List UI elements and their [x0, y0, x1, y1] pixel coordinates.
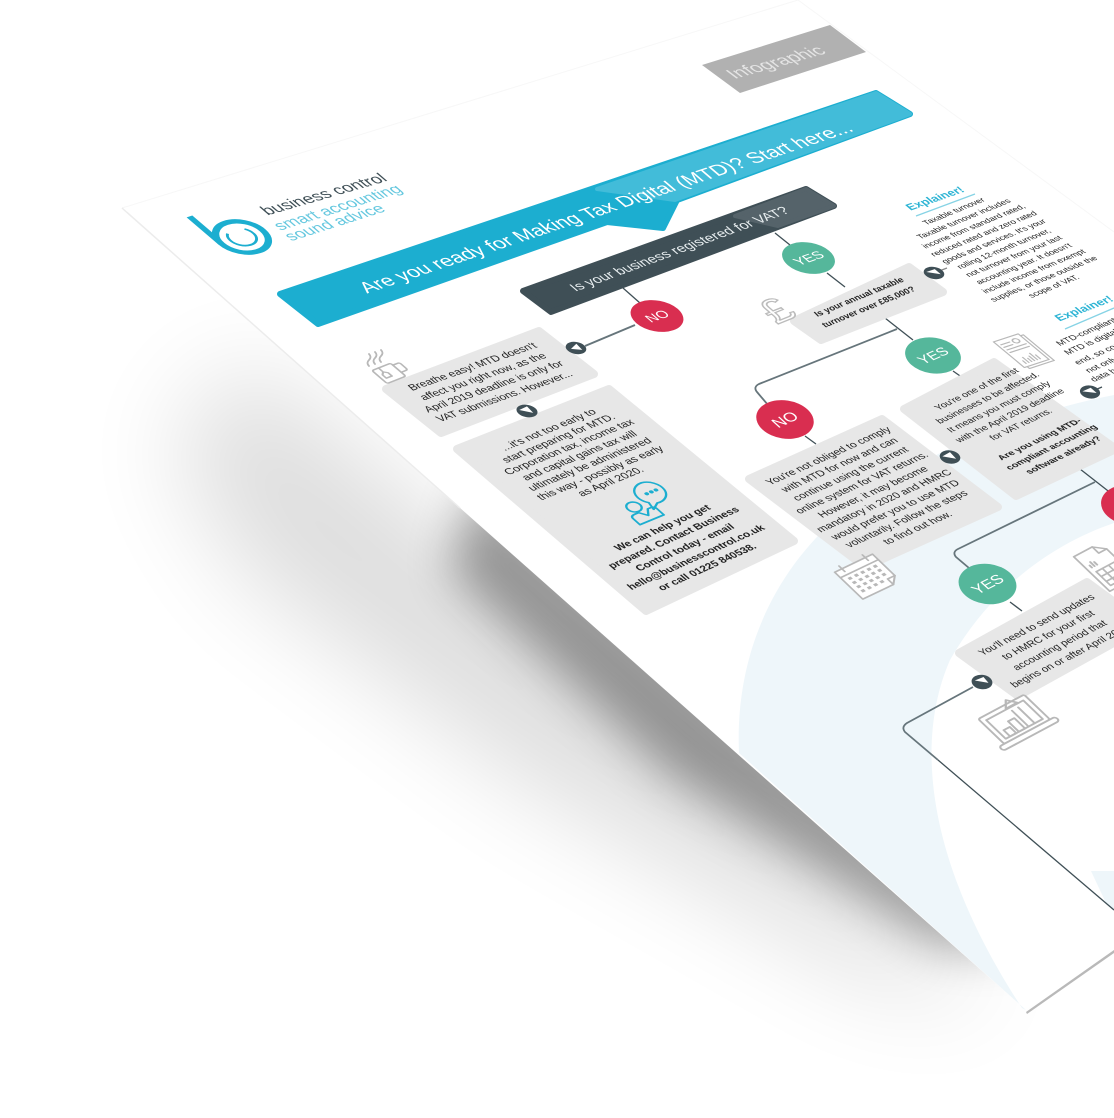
title banner	[280, 93, 910, 324]
panel: not obliged: continue using the current	[790, 445, 912, 503]
text: call to action: We can help you get	[612, 503, 714, 553]
explainer: taxable turnover: accounting year. It doesn't	[973, 241, 1075, 286]
text: MTD software question: Are you using MTD-	[995, 417, 1085, 462]
explainer: taxable turnover: not turnover from your last	[963, 234, 1065, 278]
NO badge 3	[1089, 477, 1114, 533]
NO badge 2: NO	[769, 409, 803, 431]
explainer: taxable turnover: scope of VAT.	[1025, 273, 1082, 299]
tag: Infographic: Infographic	[721, 43, 832, 82]
panel: not obliged: online system for VAT returns.	[793, 450, 932, 516]
text: not too early	[481, 400, 679, 512]
panel: breathe easy: VAT submissions. However...	[434, 369, 576, 424]
panel: not obliged: voluntarily. Follow the steps	[843, 489, 971, 550]
panel: send updates: to HMRC for your first	[1000, 609, 1098, 662]
icon: mug	[368, 350, 412, 384]
icon: person with speech bubble	[608, 478, 684, 525]
icon: spreadsheet	[1074, 543, 1114, 591]
YES badge 3: YES	[968, 572, 1008, 597]
panel: annual taxable turnover: turnover over £85,000?	[820, 285, 918, 329]
panel: not obliged: However, it may become	[815, 464, 931, 520]
title banner: Are you ready for Making Tax Digital (MTD)? Start here...	[354, 119, 859, 297]
panel: not too early	[457, 389, 794, 611]
arrow bullet: to second explainer	[1076, 383, 1104, 401]
background pale arc	[739, 395, 1114, 1010]
panel: first businesses	[904, 360, 1114, 496]
tag: Infographic	[702, 25, 866, 93]
panel: annual taxable turnover: Is your annual taxable	[812, 275, 906, 318]
YES badge 3	[947, 556, 1028, 612]
explainer: taxable turnover: include income from exempt	[979, 247, 1088, 295]
icon: pound sign: £	[748, 291, 807, 331]
explainer: taxable turnover	[897, 184, 1110, 311]
icon: calendar	[832, 551, 901, 599]
logo: business control	[189, 170, 407, 258]
explainer: taxable turnover: income from standard rated,	[919, 203, 1028, 250]
panel: not obliged	[749, 419, 998, 567]
explainer: MTD-compliant software	[1051, 293, 1114, 383]
panel: not obliged: to find out how.	[880, 510, 955, 547]
text: not too early: ultimately be administered	[526, 436, 655, 493]
text: first businesses: You're one of the first	[932, 366, 1022, 412]
panel: not obliged: mandatory in 2020 and HMRC	[814, 468, 955, 535]
text: call to action: Control today - email	[633, 522, 738, 573]
text: call to action: prepared. Contact Business	[605, 505, 742, 571]
logo tagline: smart accounting	[269, 182, 407, 233]
text: first businesses: with the April 2019 deadline	[952, 387, 1067, 445]
logo name: business control	[255, 170, 391, 218]
NO badge 1: NO	[641, 307, 673, 325]
text: first businesses	[919, 360, 1078, 454]
text: call to action: hello@businesscontrol.co.uk	[625, 523, 768, 592]
YES badge 2	[894, 331, 972, 380]
text: not too early: this way - possibly as early	[535, 444, 667, 502]
text: not too early: as April 2020.	[575, 465, 647, 499]
YES badge 1	[771, 237, 846, 279]
text: not too early: Corporation tax, income tax	[502, 417, 638, 477]
arrow bullet: to breathe easy	[562, 340, 590, 356]
explainer: taxable turnover: rolling 12-month turnover,	[954, 227, 1053, 270]
panel: not obliged: You're not obliged to comply	[763, 425, 895, 487]
panel: breathe easy: April 2019 deadline is only for	[422, 359, 567, 415]
text: call to action	[591, 493, 779, 602]
question: VAT registered: Is your business registered for VAT?	[567, 205, 793, 294]
panel: send updates: accounting period that	[1011, 619, 1110, 673]
text: first businesses: It means you must comply	[945, 379, 1054, 435]
NO badge 1	[620, 295, 694, 337]
panel: send updates: You'll need to send updates	[977, 593, 1098, 658]
explainer: taxable turnover: Taxable turnover	[920, 196, 987, 226]
logo tagline 2: sound advice	[280, 201, 390, 244]
YES badge 1: YES	[789, 248, 828, 268]
arrow bullet: to not obliged	[935, 448, 965, 466]
explainer: taxable turnover: Taxable turnover includes	[914, 197, 1014, 240]
panel: breathe easy: affect you right now, as the	[417, 351, 550, 403]
panel: not obliged: would prefer you to use MTD	[827, 478, 963, 542]
text: not too early: start preparing for MTD.	[500, 412, 619, 465]
YES badge 2: YES	[914, 345, 953, 367]
icon: report document	[994, 333, 1054, 369]
arrow bullet: from send updates	[967, 672, 997, 692]
icon: laptop with chart	[970, 689, 1060, 751]
text: not too early: ...it's not too early to	[498, 407, 599, 453]
text: not too early: and capital gains tax will	[519, 429, 640, 483]
text: MTD software question: compliant accounting	[1003, 423, 1101, 472]
NO badge 2	[745, 393, 825, 446]
question: VAT registered	[523, 189, 834, 312]
arrow bullet: to not too early	[512, 402, 542, 420]
panel: annual taxable turnover	[794, 267, 943, 340]
text: call to action: or call 01225 840538.	[655, 542, 760, 593]
page shadow	[170, 360, 1020, 1000]
arrow bullet: to explainer	[920, 265, 948, 281]
panel: breathe easy: Breathe easy! MTD doesn't	[406, 341, 540, 393]
panel: breathe easy	[386, 331, 594, 433]
background pale arc corner	[1091, 871, 1114, 911]
panel: not obliged: with MTD for now and can	[778, 436, 901, 495]
explainer: taxable turnover: supplies, or those outside the	[987, 254, 1100, 303]
icon: b mark	[189, 203, 279, 258]
connector lines	[585, 233, 1114, 910]
text: first businesses: businesses to be affected.	[934, 371, 1043, 426]
text: MTD software question	[991, 415, 1113, 480]
text: first businesses: for VAT returns.	[987, 407, 1055, 442]
explainer: taxable turnover: goods and services. It's your	[939, 217, 1048, 265]
explainer: taxable turnover: reduced rated and zero rated	[928, 209, 1040, 258]
explainer: taxable turnover: Explainer!	[902, 184, 968, 213]
panel: send updates	[959, 582, 1114, 696]
text: MTD software question: software already?	[1023, 435, 1105, 476]
